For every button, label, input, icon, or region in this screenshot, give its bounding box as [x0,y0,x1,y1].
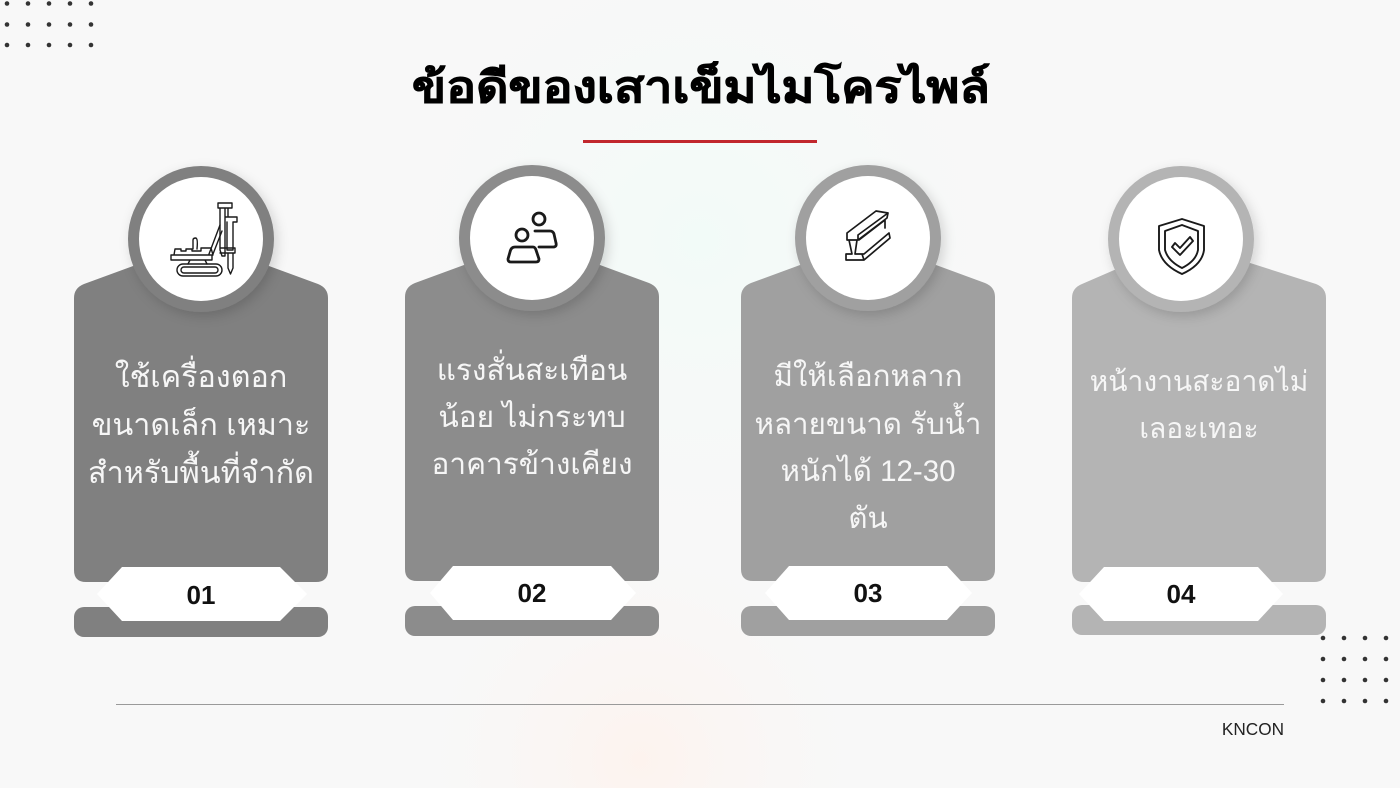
card 1 circle [128,166,274,312]
card 2 body [405,240,659,581]
card 1 base bar [74,607,328,637]
panel: card 4 [1072,166,1326,635]
card 2 text: แรงสั่นสะเทือน [437,349,627,387]
card 4 number badge [1079,567,1283,621]
card 2 text [431,349,633,481]
card 1 body [74,241,328,582]
card 1 text: สำหรับพื้นที่จำกัด [88,451,314,490]
card 3 body [741,240,995,581]
panel: card 2 [405,165,659,636]
card 3 number badge [765,566,972,620]
card 4 text: เลอะเทอะ [1139,412,1259,444]
dot pattern: top left [5,1,93,47]
card 3 text [755,359,981,535]
title: ข้อดีของเสาเข็มไมโครไพล์ [412,61,990,112]
card 4 text [1090,365,1308,444]
icon: drilling rig [171,203,237,276]
card 2 number badge: 02 [518,578,546,608]
icon: shield check [1159,219,1204,274]
card 1 text [88,355,314,490]
card 2 text: น้อย ไม่กระทบ [438,400,626,434]
card 3 base bar [741,606,995,636]
card 4 text: หน้างานสะอาดไม่ [1090,365,1308,397]
card 4 base bar [1072,605,1326,635]
dot pattern: bottom right [1321,636,1388,703]
card 3 text: หลายขนาด รับน้ำ [755,403,981,441]
icon: steel I-beam [846,211,890,260]
card 3 text: หนักได้ 12-30 [780,454,956,488]
card 4 circle [1108,166,1254,312]
card 2 number badge [430,566,636,620]
card 3 text: ตัน [848,502,888,535]
card 1 text: ขนาดเล็ก เหมาะ [92,406,310,442]
card 1 text: ใช้เครื่องตอก [115,355,287,394]
card 2 base bar [405,606,659,636]
panel: card 3 [741,165,995,636]
card 2 text: อาคารข้างเคียง [431,448,633,481]
card 3 circle [795,165,941,311]
card 1 number badge [97,567,307,621]
card 2 circle [459,165,605,311]
title underline [583,140,817,143]
card 1 number badge: 01 [187,580,215,610]
card 4 body [1072,241,1326,582]
card 4 number badge: 04 [1167,579,1196,609]
icon: people [508,213,556,262]
card 3 number badge: 03 [854,578,882,608]
panel: card 1 [74,166,328,637]
card 3 text: มีให้เลือกหลาก [774,359,962,393]
footer brand: KNCON [1222,719,1284,739]
footer rule [116,704,1284,705]
